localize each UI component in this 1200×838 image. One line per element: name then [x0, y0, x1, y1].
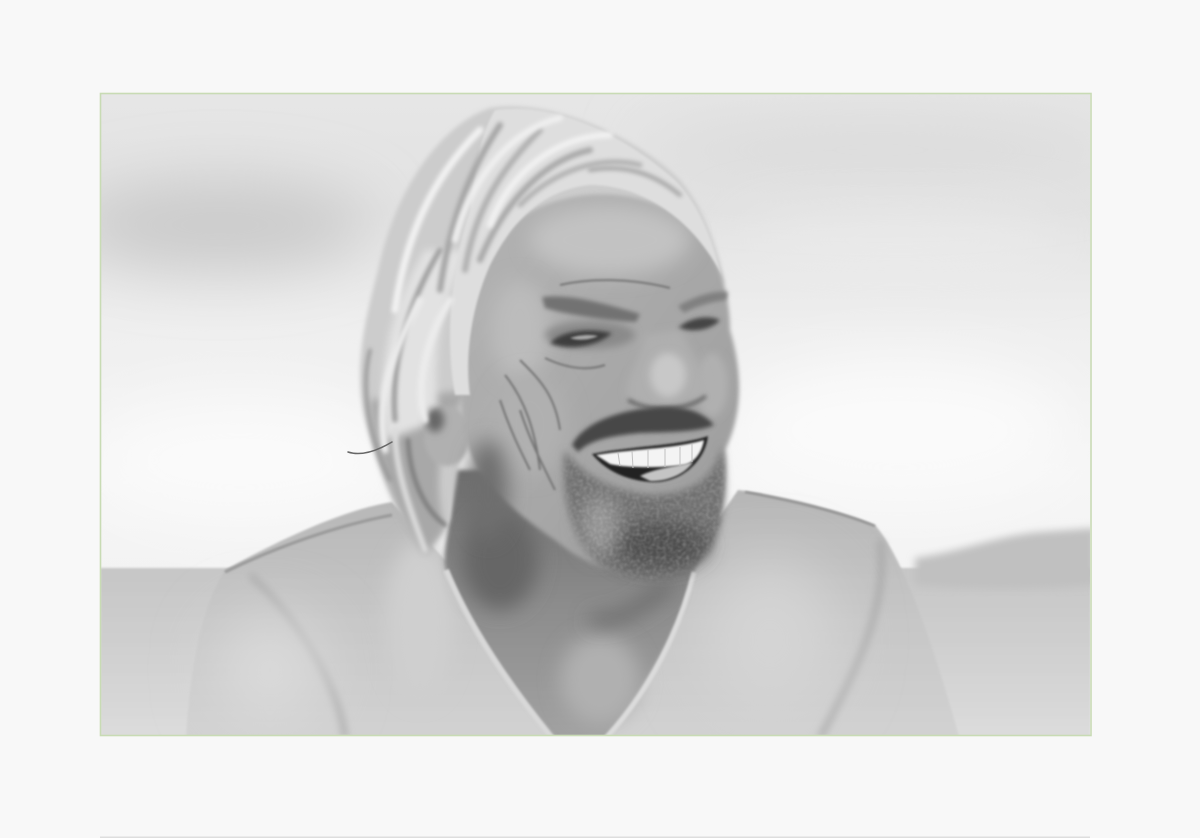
bottom edge strip of next image — [100, 836, 1090, 838]
shirt — [186, 490, 960, 740]
beard — [564, 445, 725, 579]
nose — [627, 330, 706, 409]
eye socket shadow — [545, 321, 635, 349]
neck and chest — [445, 470, 720, 738]
sky — [101, 94, 1090, 352]
smile — [592, 436, 708, 482]
hair back — [360, 107, 725, 555]
eyebrows — [542, 292, 728, 322]
ear — [424, 406, 470, 466]
moustache — [572, 407, 714, 452]
photo content — [70, 93, 1120, 740]
eyes — [550, 317, 720, 347]
portrait photo illustration — [100, 92, 1092, 838]
green photo border — [100, 94, 1091, 736]
right cheek — [702, 356, 727, 416]
cheek wrinkles — [500, 280, 670, 490]
face — [461, 194, 739, 576]
sea and distant hill — [100, 528, 1095, 738]
hair front strands — [348, 108, 722, 550]
